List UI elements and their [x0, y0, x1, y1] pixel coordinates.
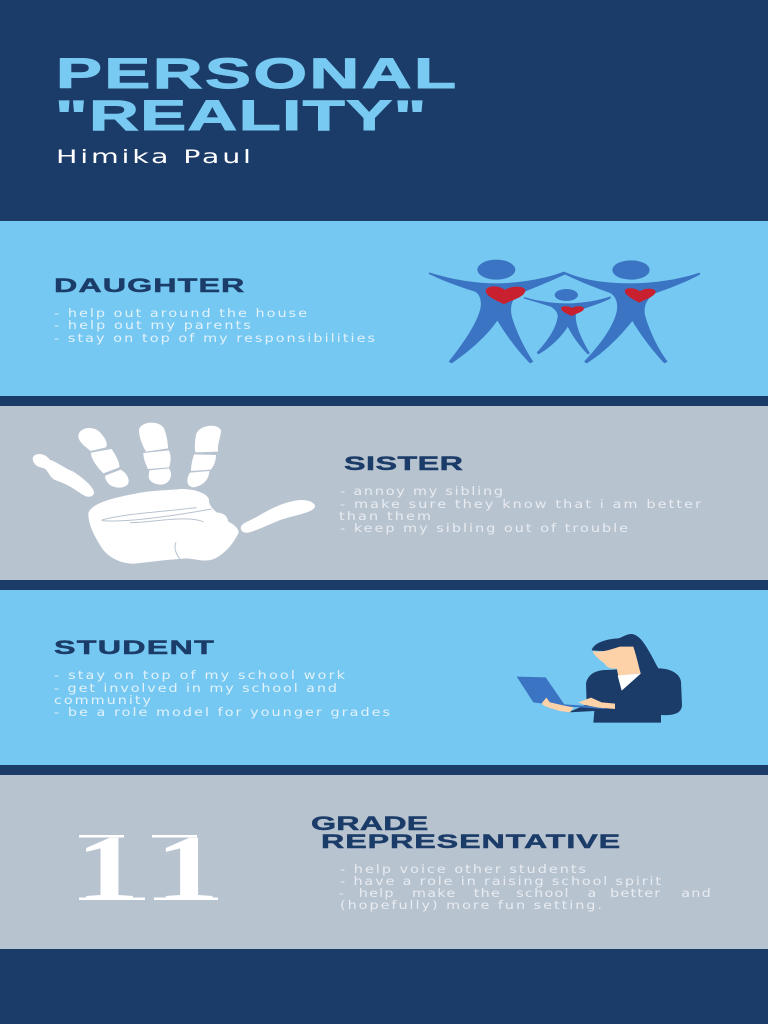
text block: representative duties: and [681, 887, 712, 901]
text block: representative duties: the [474, 887, 501, 901]
text block: student duties [54, 669, 390, 720]
text block: daughter duties: - help out my parents [54, 319, 251, 333]
panel: grade representative [0, 775, 768, 949]
number eleven: 11 [76, 817, 219, 921]
text block: representative duties: - [339, 887, 345, 901]
text block: student duties: - stay on top of my school work [54, 669, 346, 683]
icon: family with hearts [429, 260, 700, 363]
text block: representative duties: a [588, 887, 598, 901]
panel: daughter [0, 221, 768, 396]
text block: representative duties: (hopefully) more fun setting. [340, 899, 602, 913]
author name: Himika Paul [56, 146, 251, 168]
text block: student duties: - get involved in my school and [54, 682, 337, 696]
text block: daughter duties [54, 307, 375, 346]
text block: representative duties: make [412, 887, 456, 901]
text block: sister duties: - annoy my sibling [340, 485, 503, 499]
text block: student duties: community [54, 694, 151, 708]
text block: daughter duties: - help out around the house [54, 307, 307, 321]
text block: sister duties: - keep my sibling out of trouble [340, 522, 628, 536]
panel: sister [0, 406, 768, 580]
panel: header [0, 0, 768, 221]
text block: daughter duties: - stay on top of my responsibilities [54, 332, 375, 346]
icon: white handprint [33, 423, 315, 564]
title: PERSONAL [56, 50, 456, 98]
text block: representative duties: better [610, 887, 661, 901]
text block: representative duties: - help voice other students [340, 863, 586, 877]
heading: student: STUDENT [54, 637, 214, 658]
heading: grade representative: GRADE [311, 813, 428, 834]
panel: student [0, 590, 768, 765]
icon: woman with laptop [517, 634, 682, 723]
text block: sister duties: - make sure they know that i am better [340, 498, 702, 512]
title [55, 50, 456, 140]
text block: representative duties: help [359, 887, 395, 901]
text block: representative duties: school [516, 887, 570, 901]
text block: representative duties: - have a role in raising school spirit [340, 875, 661, 889]
title: "REALITY" [55, 92, 426, 140]
text block: sister duties [339, 485, 702, 536]
heading: grade representative [311, 813, 620, 852]
text block: student duties: - be a role model for younger grades [54, 706, 390, 720]
text block: representative duties [339, 863, 712, 913]
text block: sister duties: than them [339, 510, 431, 524]
heading: daughter: DAUGHTER [54, 275, 244, 296]
heading: grade representative: REPRESENTATIVE [321, 831, 620, 852]
heading: sister: SISTER [344, 453, 463, 474]
